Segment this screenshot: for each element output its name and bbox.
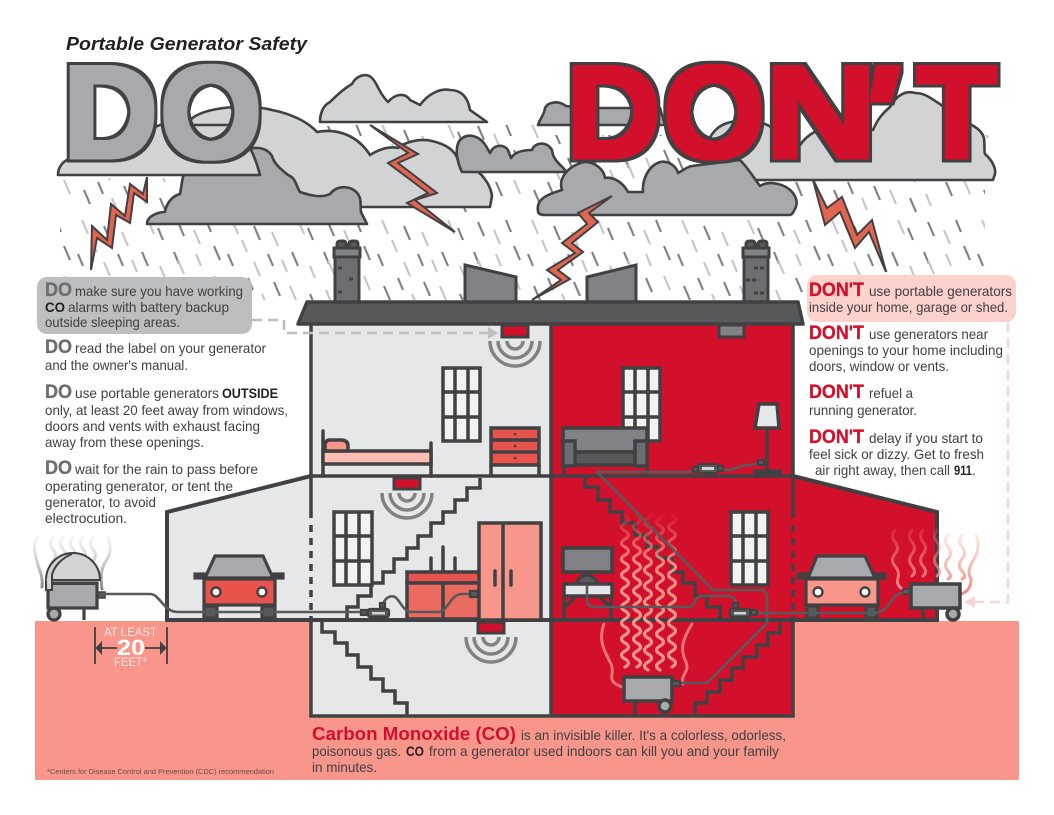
left half interior: [311, 325, 551, 716]
chimneys and roof vents: [334, 241, 769, 303]
cloud: dark right of centre: [457, 136, 565, 172]
text: DON'T use near openings: doors, window or vents.: [809, 358, 949, 374]
text: DO use outside: away from these openings.: [45, 434, 204, 450]
distance marker: at least 20 feet: AT LEAST: [104, 627, 157, 639]
left generator with tent: [46, 553, 105, 620]
left annex: [167, 476, 311, 620]
heat waves: basement generator: [622, 510, 676, 670]
window middle left: [334, 512, 372, 585]
text: DON'T delay: .: [972, 462, 976, 478]
text: DO use outside: doors and vents with exhaust facing: [45, 418, 260, 434]
text: DON'T refuel: running generator.: [809, 402, 917, 418]
text: carbon monoxide warning: is an invisible killer. It's a colorless, odorless,: [521, 727, 786, 743]
text: DON'T delay: 911: [954, 462, 972, 478]
heading DON'T: T: [917, 39, 996, 185]
bolt: top centre: [370, 125, 455, 232]
text: carbon monoxide warning: from a generator used indoors can kill you and your family: [429, 743, 779, 759]
callout: indoor highlight: [807, 275, 1016, 322]
text: DON'T delay: feel sick or dizzy. Get to fresh: [809, 446, 984, 462]
text: DO read label: [45, 337, 266, 373]
heat waves: left generator: [34, 537, 110, 589]
dresser: [491, 428, 539, 476]
roof: [298, 302, 803, 324]
alarm basement: [466, 622, 516, 662]
windows: [334, 368, 768, 585]
panel: DON'T list: [807, 275, 1016, 478]
bolt: right: [813, 180, 886, 272]
cloud: top centre: [320, 75, 487, 122]
window upper right: [623, 368, 660, 441]
alarm top left: [490, 325, 540, 366]
basement generator: [624, 677, 672, 716]
cloud: behind DON'T left: [538, 102, 665, 125]
text: DO wait for rain: DO: [45, 458, 72, 479]
text: DO use outside: DO: [45, 382, 72, 403]
rain: [60, 125, 990, 300]
car right: [798, 556, 885, 618]
lamp: [755, 404, 780, 475]
stairs: [322, 478, 780, 716]
ground: [35, 621, 1019, 780]
text: DON'T delay: delay if you start to: [869, 430, 983, 446]
connector: right lower power strip: [730, 603, 757, 617]
dashed arrow: grey box to alarm: [252, 320, 498, 339]
bolt: centre to roof: [532, 196, 612, 300]
text: DO alarms: CO: [45, 299, 65, 315]
cords: [105, 463, 902, 683]
panel: DO list: [37, 277, 288, 526]
text: DO use outside: use portable generators: [75, 385, 219, 401]
text: DO read label: DO: [45, 337, 72, 358]
footnote: *Centers for Disease Control and Prevention (CDC) recommendation: [47, 767, 274, 776]
window upper left: [443, 368, 480, 441]
window middle right: [731, 512, 768, 585]
heading DON'T: N: [765, 39, 877, 185]
text: DO alarms: [45, 280, 243, 330]
text: DO wait for rain: operating generator, or tent the: [45, 478, 233, 494]
cloud: big light behind: [190, 107, 492, 207]
connector: upper power strip: [693, 460, 764, 473]
text: DON'T refuel: DON'T: [809, 382, 864, 403]
text: DON'T refuel: refuel a: [869, 385, 913, 401]
text: carbon monoxide warning: poisonous gas.: [312, 743, 401, 759]
text: DON'T use near openings: use generators near: [869, 326, 988, 342]
text: DO wait for rain: [45, 458, 258, 526]
callout: alarm highlight: [37, 277, 252, 334]
text: DON'T delay: DON'T: [809, 427, 864, 448]
sofa: [563, 428, 647, 476]
text: DO alarms: make sure you have working: [75, 283, 243, 299]
text: DO alarms: alarms with battery backup: [68, 299, 229, 315]
right annex: [793, 476, 937, 620]
alarm middle: [382, 478, 432, 518]
cloud: dark left: [147, 148, 367, 224]
bolt: left: [91, 177, 147, 270]
text: DO wait for rain: wait for the rain to pass before: [74, 461, 258, 477]
text: DO read label: read the label on your generator: [75, 340, 266, 356]
CO alarms: [382, 325, 744, 662]
text: DON'T use near openings: DON'T: [809, 323, 864, 344]
text: carbon monoxide warning: in minutes.: [312, 759, 377, 775]
right half interior: [551, 325, 793, 716]
car left: [195, 556, 283, 618]
text: carbon monoxide warning: [312, 723, 786, 775]
chimney left: [334, 241, 360, 303]
text: DO use outside: [45, 382, 288, 450]
text: DON'T use inside: inside your home, garage or shed.: [809, 299, 1008, 315]
heading DON'T: ': [858, 39, 899, 185]
text: DON'T delay: [809, 427, 984, 478]
text: DO alarms: DO: [45, 280, 72, 301]
text: carbon monoxide warning: CO: [406, 743, 424, 759]
text: DO wait for rain: electrocution.: [45, 510, 127, 526]
heat waves: basement outer: [602, 624, 692, 687]
bed: [323, 431, 431, 476]
plug: basement generator: [672, 681, 680, 686]
plugs and connectors: [361, 460, 764, 686]
vent left: [465, 265, 516, 303]
lightning bolts: [91, 125, 886, 300]
text: DO use outside: only, at least 20 feet away from windows,: [45, 402, 288, 418]
text: DO wait for rain: generator, to avoid: [45, 494, 156, 510]
text: carbon monoxide warning: Carbon Monoxide (CO): [312, 723, 516, 744]
heat waves: right generator: [892, 530, 978, 594]
alarm top right: [719, 325, 744, 337]
plug: cabinet side: [470, 591, 478, 597]
vent right: [587, 265, 636, 303]
house: [167, 325, 937, 716]
cloud: under DO: [58, 125, 260, 175]
text: DON'T use near openings: [809, 323, 1003, 374]
desk and TV: [563, 548, 612, 620]
kitchen counter: [407, 547, 480, 619]
text: DON'T use near openings: openings to your home including: [809, 342, 1003, 358]
text: DON'T use inside: use portable generators: [869, 283, 1012, 299]
cloud: light right: [709, 92, 995, 180]
text: DON'T use inside: DON'T: [809, 280, 864, 301]
text: DO alarms: outside sleeping areas.: [45, 314, 180, 330]
right generator: [903, 584, 960, 620]
text: DO read label: and the owner's manual.: [45, 357, 188, 373]
heading DON'T: DO: [566, 39, 765, 185]
connector: left power strip: [361, 603, 389, 617]
cloud: dark centre right: [538, 160, 797, 215]
text: DON'T refuel: [809, 382, 917, 418]
distance marker: at least 20 feet: [95, 627, 167, 669]
chimney right: [743, 241, 769, 303]
distance marker: at least 20 feet: 20: [117, 635, 145, 660]
text: DON'T use inside: [809, 280, 1012, 315]
cabinet: [479, 523, 541, 620]
clouds: [58, 75, 995, 224]
dashed arrow: pink box to generator: [964, 322, 1008, 608]
text: DON'T delay: air right away, then call: [815, 462, 950, 478]
text: DO use outside: OUTSIDE: [222, 385, 278, 401]
distance marker: at least 20 feet: FEET*: [114, 657, 148, 669]
structural lines: [167, 325, 937, 716]
heading DO: DO: [64, 39, 262, 185]
title: Portable Generator Safety: [66, 34, 308, 54]
